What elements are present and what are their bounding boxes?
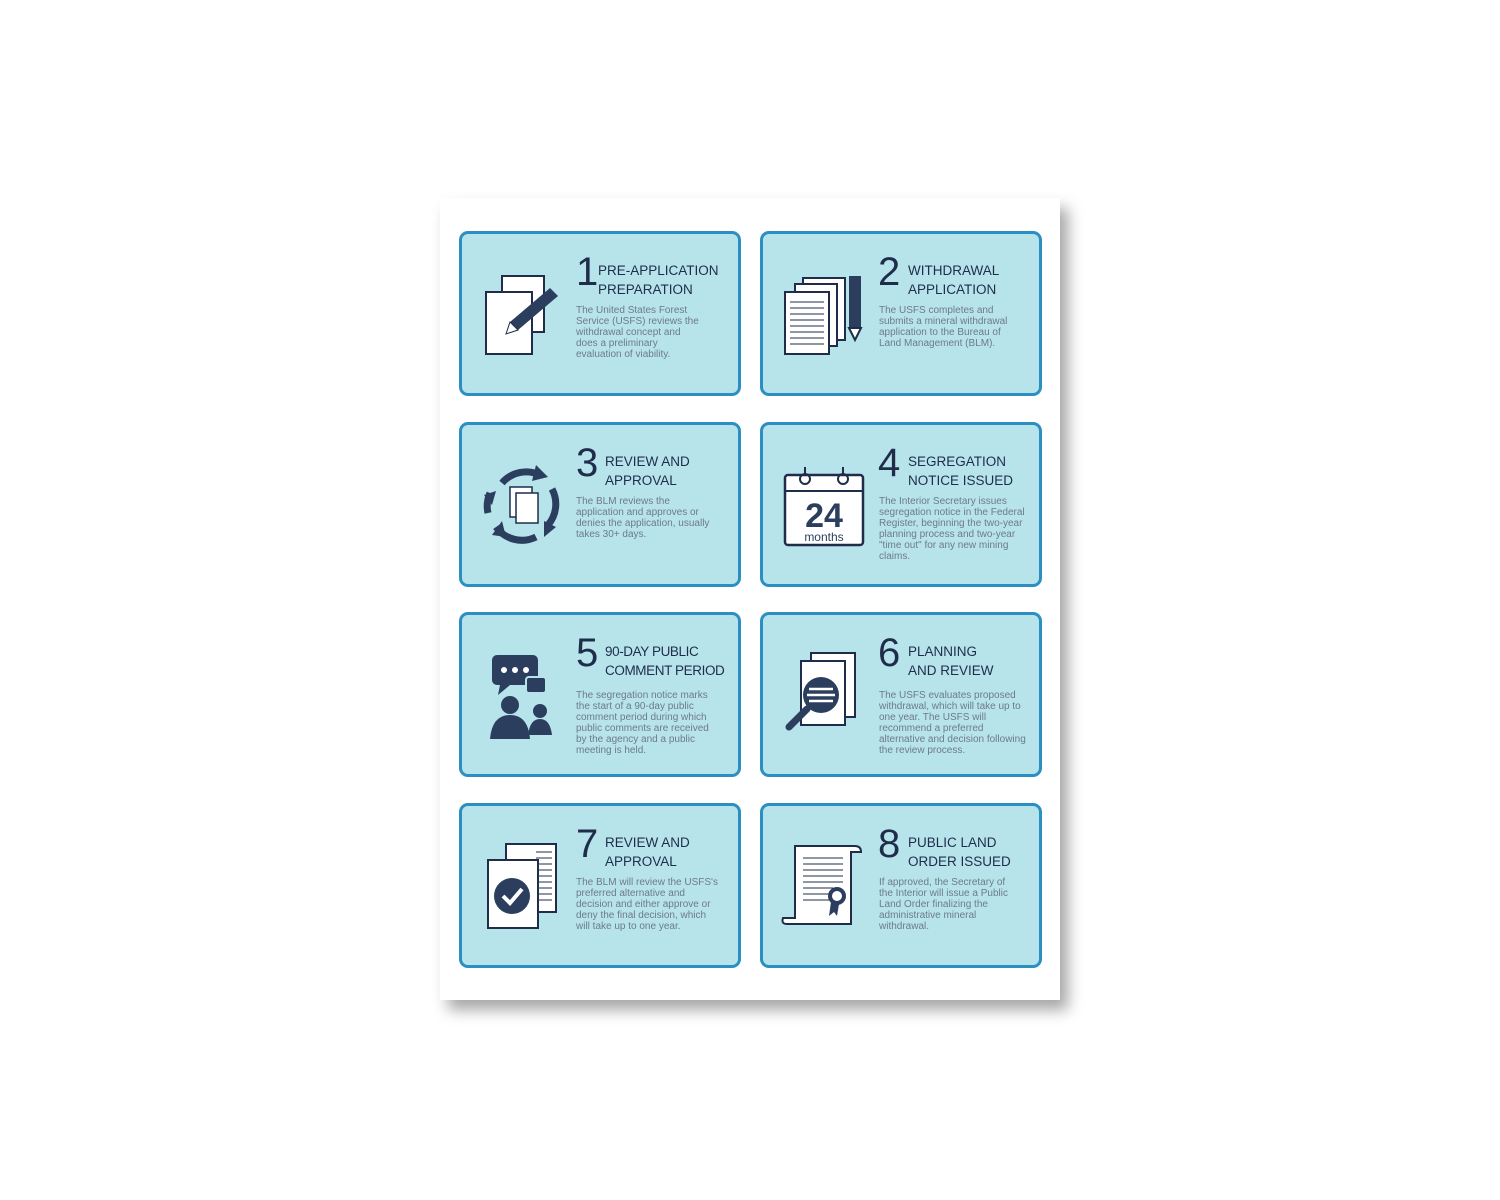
- text 2: The USFS completes and submits a mineral withdrawal application to the Bureau of Land Management (BLM).: [879, 305, 1007, 349]
- number 1: 1: [576, 250, 598, 294]
- title 4: [908, 454, 1013, 488]
- title 3: REVIEW AND: [605, 454, 690, 469]
- card 2: [760, 231, 1042, 396]
- title 5: COMMENT PERIOD: [605, 663, 724, 678]
- number 5: 5: [576, 631, 598, 675]
- title 6: PLANNING: [908, 644, 977, 659]
- text 6: The USFS evaluates proposed withdrawal, which will take up to one year. The USFS will recommend a preferred alternative and decision following the review process.: [879, 690, 1026, 756]
- number 6: 6: [878, 631, 900, 675]
- icon: cycle arrows: [484, 465, 560, 544]
- title 2: [908, 263, 999, 297]
- icon: calendar 24 months: months: [804, 530, 844, 544]
- title 2: WITHDRAWAL: [908, 263, 999, 278]
- title 5: 90-DAY PUBLIC: [605, 644, 698, 659]
- icon: documents with check: [487, 843, 557, 929]
- title 4: NOTICE ISSUED: [908, 473, 1013, 488]
- text 7: The BLM will review the USFS's preferred alternative and decision and either approve or deny the final decision, which will take up to one year.: [576, 877, 718, 932]
- title 6: [908, 644, 994, 678]
- title 7: [605, 835, 690, 869]
- card 7: [459, 803, 741, 968]
- title 7: APPROVAL: [605, 854, 677, 869]
- title 8: PUBLIC LAND: [908, 835, 997, 850]
- page sheet: [440, 198, 1060, 1000]
- icon: calendar 24 months: [784, 467, 864, 546]
- icon: people and speech bubbles: [490, 655, 552, 739]
- number 3: 3: [576, 441, 598, 485]
- title 1: PREPARATION: [598, 282, 693, 297]
- icon: documents with magnifier: [786, 652, 856, 730]
- card 8: [760, 803, 1042, 968]
- text 3: The BLM reviews the application and approves or denies the application, usually takes 30+ days.: [576, 496, 709, 540]
- text 8: If approved, the Secretary of the Interior will issue a Public Land Order finalizing the administrative mineral withdrawal.: [879, 877, 1008, 932]
- icon: documents and pen: [784, 276, 863, 355]
- title 1: PRE-APPLICATION: [598, 263, 719, 278]
- title 4: SEGREGATION: [908, 454, 1006, 469]
- card 3: [459, 422, 741, 587]
- title 8: ORDER ISSUED: [908, 854, 1011, 869]
- title 3: APPROVAL: [605, 473, 677, 488]
- icon: papers and pencil: [485, 275, 558, 355]
- text 5: The segregation notice marks the start of a 90-day public comment period during which public comments are received by the agency and a public meeting is held.: [576, 690, 709, 756]
- title 3: [605, 454, 690, 488]
- title 8: [908, 835, 1011, 869]
- number 8: 8: [878, 822, 900, 866]
- card 5: [459, 612, 741, 777]
- title 1: [598, 263, 719, 297]
- title 6: AND REVIEW: [908, 663, 994, 678]
- title 5: [605, 644, 724, 678]
- icon: scroll with seal: [782, 845, 862, 925]
- number 2: 2: [878, 250, 900, 294]
- title 2: APPLICATION: [908, 282, 996, 297]
- number 7: 7: [576, 822, 598, 866]
- card 4: [760, 422, 1042, 587]
- title 7: REVIEW AND: [605, 835, 690, 850]
- text 4: The Interior Secretary issues segregation notice in the Federal Register, beginning the two-year planning process and two-year "time out" for any new mining claims.: [879, 496, 1025, 562]
- card 1: [459, 231, 741, 396]
- number 4: 4: [878, 441, 900, 485]
- card 6: [760, 612, 1042, 777]
- icon: calendar 24 months: 24: [805, 497, 843, 535]
- text 1: The United States Forest Service (USFS) reviews the withdrawal concept and does a preliminary evaluation of viability.: [576, 305, 699, 360]
